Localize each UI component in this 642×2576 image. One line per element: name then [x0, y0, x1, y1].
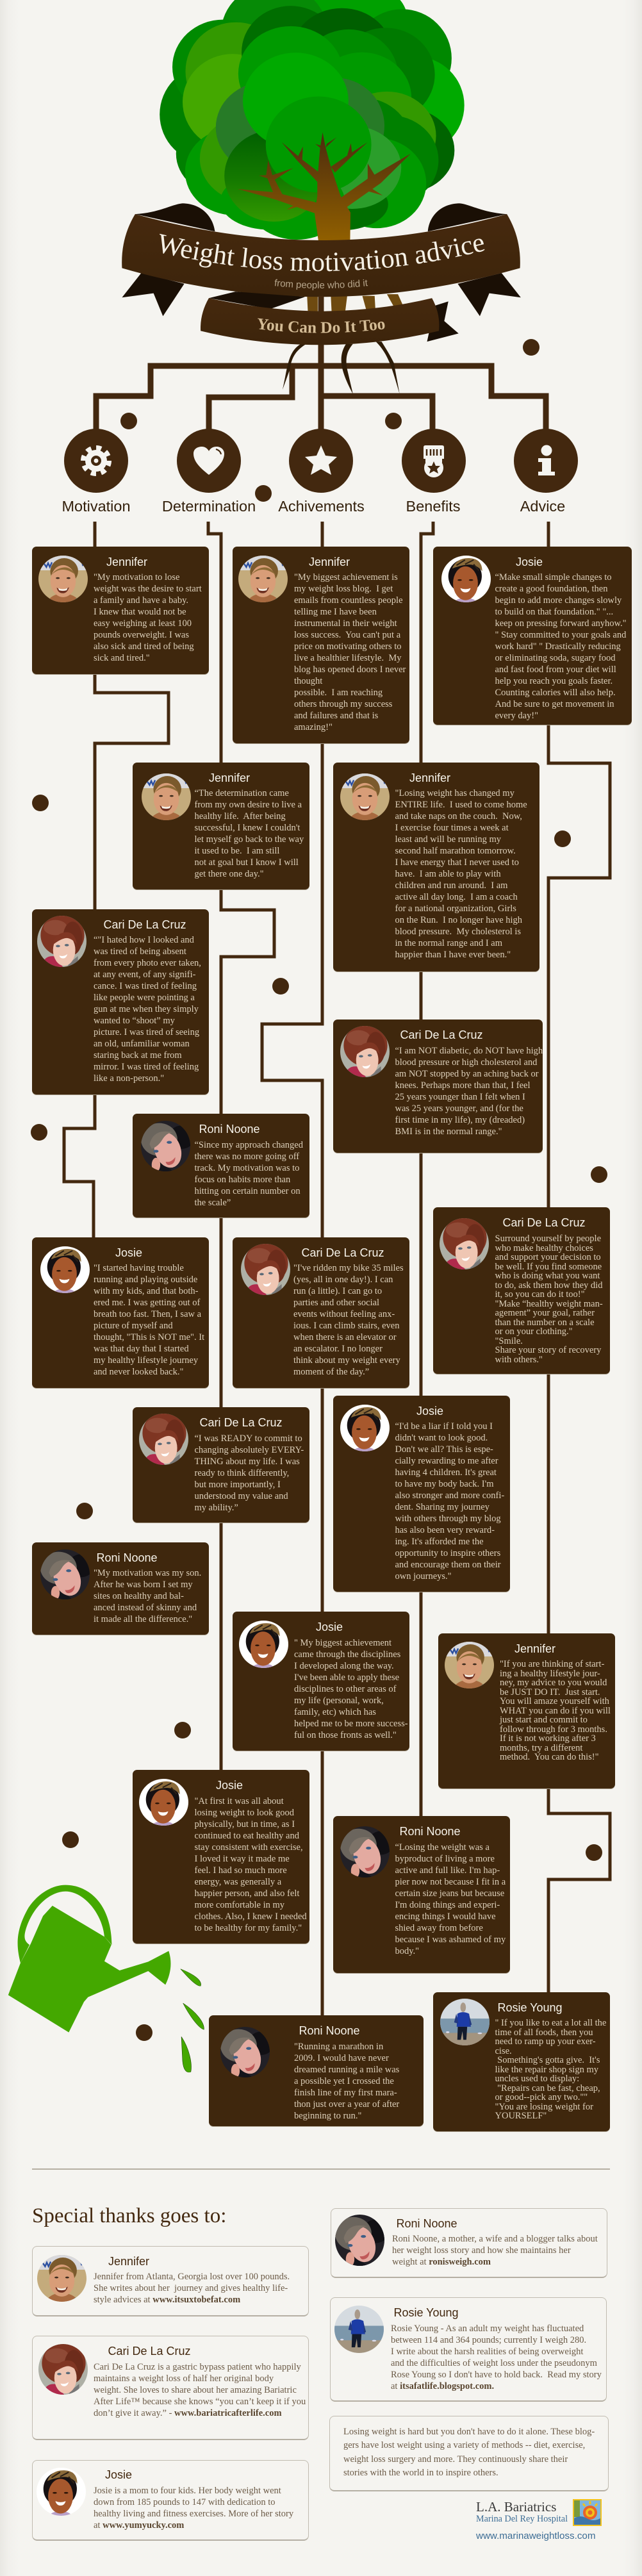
small banner: [201, 292, 459, 345]
icon: star: [305, 445, 337, 475]
name: Roni Noone: [399, 1825, 461, 1838]
avatar: Jennifer: [238, 556, 288, 602]
card: Jennifer, achievements: [233, 547, 409, 743]
avatar: Josie: [40, 1246, 90, 1293]
card: Roni Noone, benefits: [333, 1816, 510, 1973]
card: Josie, achievements: [233, 1612, 409, 1751]
avatar: Jennifer: [445, 1642, 494, 1688]
card: Jennifer, benefits: [333, 763, 539, 971]
avatar: Rosie: [440, 1999, 490, 2045]
quote: " My biggest achievement came through the disciplines I developed along the way. I've been able to apply these disciplines to other areas of my life (personal, work, family, etc) which has helped me to be more success- ful on those fronts as well.": [294, 1638, 408, 1740]
closing note: Losing weight is hard but you don't have to do it alone. These blog- gers have lost weight using a variety of methods -- diet, exercise, weight loss surgery and more. They continuously share their stories with the world in to inspire others.: [343, 2427, 595, 2478]
category: Determination: [162, 429, 256, 515]
card: Cari De La Cruz, benefits: [333, 1020, 543, 1153]
name: Josie: [416, 1405, 443, 1417]
logo: L.A. Bariatrics: [476, 2499, 602, 2541]
bio: Josie is a mom to four kids. Her body weight went down from 185 pounds to 147 with dedication to healthy living and fitness exercises. More of her story at www.yumyucky.com: [94, 2486, 293, 2531]
category: Determination: Determination: [162, 498, 256, 515]
subtitle: from people who did it: [274, 279, 368, 290]
card: Josie, benefits: [333, 1396, 510, 1592]
avatar: Josie: [441, 556, 491, 602]
card: Jennifer, motivation: [32, 547, 209, 674]
card: Roni Noone, motivation: [32, 1542, 209, 1635]
category: Achivements: Achivements: [278, 498, 365, 515]
quote: “Make small simple changes to create a good foundation, then begin to add more changes slowly to build on that foundation." "... keep on pressing forward anyhow." " Stay committed to your goals and work hard" " Drastically reducing or eliminating soda, sugary food and fast food from your diet will help you reach you goals faster. Counting calories will also help. And be sure to get movement in every day!": [495, 572, 627, 721]
card: Josie, determination: [133, 1770, 309, 1944]
quote: "I've ridden my bike 35 miles (yes, all in one day!). I can run (a little). I can go to parties and other social events without feeling anx- ious. I can climb stairs, even when there is an elevator or an escalator. I no longer think about my weight every moment of the day.”: [293, 1263, 404, 1377]
thanks box: Rosie Young: [330, 2297, 607, 2402]
quote: Surround yourself by people who make healthy choices and support your decision to be well. If you find someone who is doing what you want to do, ask them how they did it, so you can do it too!" "Make “healthy weight man- agement” your goal, rather than the number on a scale or on your clothing." "Smile. Share your story of recovery with others.": [495, 1234, 603, 1365]
name: Josie: [216, 1779, 243, 1792]
avatar: Josie: [239, 1621, 288, 1668]
icon: heart: [193, 447, 224, 475]
name: Josie: [516, 556, 543, 568]
logo wordmark: L.A. Bariatrics: [476, 2499, 556, 2514]
connector lines: cards: [64, 522, 610, 2019]
decorative dots: [31, 339, 607, 2041]
name: Josie: [105, 2468, 132, 2481]
avatar: Roni: [220, 2027, 270, 2077]
category: Advice: Advice: [520, 498, 565, 515]
avatar: Roni: [340, 1826, 390, 1878]
name: Jennifer: [106, 556, 147, 568]
quote: "Running a marathon in 2009. I would have never dreamed running a mile was a possible yet I crossed the finish line of my first mara- thon just over a year of after beginning to run.": [294, 2042, 399, 2121]
quote: “Since my approach changed there was no more going off track. My motivation was to focus on habits more than hitting on certain number on the scale”: [195, 1140, 303, 1208]
name: Roni Noone: [96, 1551, 158, 1564]
name: Roni Noone: [299, 2024, 360, 2037]
name: Jennifer: [209, 772, 250, 784]
card: Cari De La Cruz, achievements: [233, 1237, 409, 1388]
card: Jennifer, determination: [133, 763, 309, 889]
card: Roni Noone, determination: [133, 1114, 309, 1218]
card: Josie, motivation: [32, 1237, 209, 1388]
tree illustration: [122, 0, 521, 394]
avatar: Roni: [141, 1121, 190, 1171]
quote: "Losing weight has changed my ENTIRE life. I used to come home and take naps on the couch. Now, I exercise four times a week at least and will be running my second half marathon tomorrow. I have energy that I never used to have. I am able to play with children and run around. I am active all day long. I am a coach for a national organization, Girls on the Run. I no longer have high blood pressure. My cholesterol is in the normal range and I am happier than I have ever been.": [395, 788, 527, 960]
avatar: Cari: [241, 1244, 290, 1295]
name: Roni Noone: [199, 1123, 260, 1135]
main banner: [122, 203, 521, 316]
name: Cari De La Cruz: [301, 1246, 384, 1259]
avatar: Cari: [37, 916, 86, 967]
name: Jennifer: [309, 556, 350, 568]
quote: "My motivation to lose weight was the desire to start a family and have a baby. I knew that would not be easy weighing at least 100 pounds overweight. I was also sick and tired of being sick and tired.": [94, 572, 202, 663]
card: Cari De La Cruz, determination: [133, 1407, 309, 1523]
category: Advice: [514, 429, 578, 515]
avatar: Josie: [37, 2468, 86, 2516]
tagline: You Can Do It Too: [258, 318, 384, 333]
name: Jennifer: [514, 1642, 556, 1655]
water drops: [181, 1969, 204, 2072]
logo subtitle: Marina Del Rey Hospital: [476, 2514, 568, 2524]
thanks box: Josie: [32, 2460, 309, 2541]
roots: [283, 294, 404, 394]
thanks box: Jennifer: [32, 2246, 309, 2316]
name: Cari De La Cruz: [103, 918, 186, 931]
thanks box: Cari De La Cruz: [32, 2336, 309, 2440]
icon: gear: [83, 448, 109, 474]
quote: "My motivation was my son. After he was born I set my sites on healthy and bal- anced instead of skinny and it made all the difference.": [94, 1568, 201, 1624]
thanks box: Roni Noone: [331, 2208, 607, 2278]
trunk and branches: [238, 133, 411, 242]
quote: “I was READY to commit to changing absolutely EVERY- THING about my life. I was ready to think differently, but more importantly, I understood my value and my ability.”: [195, 1433, 304, 1513]
connector lines: top tree: [96, 297, 546, 431]
avatar: Jennifer: [38, 556, 88, 602]
logo mark: [573, 2499, 602, 2526]
card: Rosie Young, advice: [433, 1992, 610, 2131]
quote: "If you are thinking of start- ing a healthy lifestyle jour- ney, my advice to you would be JUST DO IT. Just start. You will amaze yourself with WHAT you can do if you will just start and commit to follow through for 3 months. If it is not working after 3 months, try a different method. You can do this!": [500, 1659, 611, 1762]
category: Benefits: [402, 429, 466, 515]
avatar: Roni: [335, 2215, 384, 2266]
quote: "My biggest achievement is my weight loss blog. I get emails from countless people telling me I have been instrumental in their weight loss success. You can't put a price on motivating others to live a healthier lifestyle. My blog has opened doors I never thought possible. I am reaching others through my success and failures and that is amazing!": [294, 572, 406, 732]
name: Cari De La Cruz: [502, 1216, 586, 1229]
name: Jennifer: [108, 2255, 149, 2268]
card: Jennifer, advice: [438, 1633, 615, 1788]
card: Roni Noone, achievements: [209, 2015, 424, 2126]
category: Achivements: [278, 429, 365, 515]
title: Weight loss motivation advice: [160, 233, 484, 272]
card: Cari De La Cruz, motivation: [32, 909, 209, 1094]
avatar: Rosie: [334, 2306, 384, 2353]
closing note box: [329, 2416, 609, 2491]
category: Benefits: Benefits: [406, 498, 460, 515]
name: Josie: [115, 1246, 142, 1259]
category: Motivation: Motivation: [62, 498, 131, 515]
bio: Cari De La Cruz is a gastric bypass patient who happily maintains a weight loss of half her original body weight. She loves to share about her amazing Bariatric After Life™ because she knows “you can’t keep it if you don’t give it away.” - www.bariatricafterlife.com: [94, 2362, 306, 2418]
avatar: Josie: [340, 1405, 390, 1451]
avatar: Jennifer: [142, 773, 191, 820]
quote: " If you like to eat a lot all the time of all foods, then you need to ramp up your exer- cise. Something's gotta give. It's like the repair shop sign my uncles used to display: "Repairs can be fast, cheap, or good--pick any two."" "You are losing weight for YOURSELF": [495, 2018, 606, 2121]
category: Motivation: [62, 429, 131, 515]
avatar: Cari: [38, 2344, 88, 2395]
quote: “The determination came from my own desire to live a healthy life. After being successful, I knew I couldn't let myself go back to the way it used to be. I am still not at goal but I know I will get there one day.": [195, 788, 304, 879]
card: Cari De La Cruz, advice: [433, 1207, 610, 1374]
avatar: Josie: [139, 1779, 188, 1826]
avatar: Jennifer: [37, 2255, 86, 2302]
name: Josie: [316, 1621, 343, 1633]
bio: Roni Noone, a mother, a wife and a blogger talks about her weight loss story and how she maintains her weight at ronisweigh.com: [392, 2234, 598, 2267]
canopy: [160, 0, 465, 240]
avatar: Jennifer: [340, 773, 390, 820]
quote: "I started having trouble running and playing outside with my kids, and that both- ered me. I was getting out of breath too fast. Then, I saw a picture of myself and thought, "This is NOT me". It was that day that I started my healthy lifestyle journey and never looked back.": [94, 1263, 204, 1377]
bio: Rosie Young - As an adult my weight has fluctuated between 114 and 364 pounds; currently I weigh 280. I write about the harsh realities of being overweight and the difficulties of weight loss under the pseudonym Rose Young so I don't have to hold back. Read my story at itsafatlife.blogspot.com.: [391, 2324, 602, 2391]
quote: “Losing the weight was a byproduct of living a more active and full like. I'm hap- pier now not because I fit in a certain size jeans but because I'm doing things and experi- encing things I would have shied away from before because I was ashamed of my body.": [395, 1842, 506, 1956]
name: Cari De La Cruz: [199, 1416, 283, 1429]
bio: Jennifer from Atlanta, Georgia lost over 100 pounds. She writes about her journey and gives healthy life- style advices at www.itsuxtobefat.com: [94, 2272, 290, 2305]
name: Cari De La Cruz: [108, 2345, 191, 2357]
avatar: Roni: [40, 1549, 90, 1599]
heading: special thanks: Special thanks goes to:: [32, 2204, 226, 2227]
name: Rosie Young: [393, 2306, 459, 2319]
quote: “"I hated how I looked and was tired of being absent from every photo ever taken, at any event, of any signifi- cance. I was tired of feeling like people were pointing a gun at me when they simply wanted to “shoot” my picture. I was tired of seeing an old, unfamiliar woman staring back at me from mirror. I was tired of feeling like a non-person.": [94, 935, 201, 1084]
quote: "At first it was all about losing weight to look good physically, but in time, as I continued to eat healthy and stay consistent with exercise, I loved it way it made me feel. I had so much more energy, was generally a happier person, and also felt more comfortable in my clothes. Also, I knew I needed to be healthy for my family.": [195, 1796, 307, 1933]
avatar: Cari: [340, 1026, 390, 1077]
avatar: Cari: [139, 1414, 188, 1465]
quote: “I am NOT diabetic, do NOT have high blood pressure or high cholesterol and am NOT stopped by an aching back or knees. Perhaps more than that, I feel 25 years younger than I felt when I was 25 years younger, and (for the first time in my life), my (dreaded) BMI is in the normal range.": [395, 1046, 543, 1137]
name: Rosie Young: [497, 2001, 563, 2014]
website: www.marinaweightloss.com: [476, 2531, 596, 2541]
card: Josie, advice: [433, 547, 632, 725]
icon: watering can: [8, 1885, 204, 2072]
name: Jennifer: [409, 772, 450, 784]
icon: info: [538, 445, 555, 475]
name: Roni Noone: [396, 2217, 457, 2230]
avatar: Cari: [440, 1218, 489, 1269]
quote: “I'd be a liar if I told you I didn't want to look good. Don't we all? This is espe- cially rewarding to me after having 4 children. It's great to have my body back. I'm also stronger and more confi- dent. Sharing my journey with others through my blog has also been very reward- ing. It's afforded me the opportunity to inspire others and encourage them on their own journeys.": [395, 1421, 504, 1581]
icon: medal: [424, 445, 444, 477]
name: Cari De La Cruz: [400, 1028, 483, 1041]
